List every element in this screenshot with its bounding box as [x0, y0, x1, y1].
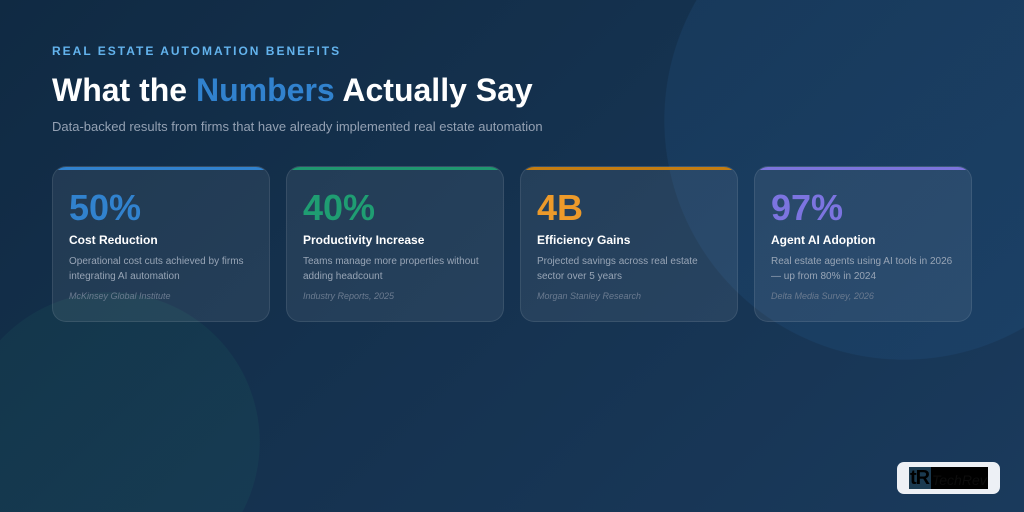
source: Morgan Stanley: Morgan Stanley Research	[537, 291, 641, 301]
description: efficiency gains: Projected savings across real estate sector over 5 years	[537, 256, 698, 282]
logo badge: TechRev	[932, 472, 987, 488]
source: McKinsey: McKinsey Global Institute	[69, 291, 171, 301]
background circle: bottom left	[0, 292, 260, 512]
source: industry reports: Industry Reports, 2025	[303, 291, 394, 301]
label: agent AI adoption: Agent AI Adoption	[771, 233, 875, 247]
source: Delta Media: Delta Media Survey, 2026	[771, 291, 874, 301]
background circle: top right	[664, 0, 1024, 360]
panel: cost reduction	[52, 166, 270, 322]
label: cost reduction: Cost Reduction	[69, 233, 158, 247]
eyebrow heading: REAL ESTATE AUTOMATION BENEFITS	[52, 44, 341, 58]
panel: agent AI adoption	[754, 166, 972, 322]
label: productivity increase: Productivity Increase	[303, 233, 424, 247]
panel: productivity increase	[286, 166, 504, 322]
logo badge: tR	[910, 467, 929, 489]
stat: 4B: 4B	[537, 187, 583, 228]
stat: 40%: 40%	[303, 187, 375, 228]
panel: efficiency gains	[520, 166, 738, 322]
title: What the Numbers Actually Say	[52, 72, 533, 108]
stat: 97%: 97%	[771, 187, 843, 228]
subtitle: Data-backed results from firms that have already implemented real estate automation	[52, 119, 543, 134]
description: agent AI adoption: Real estate agents using AI tools in 2026 — up from 80% in 2024	[771, 256, 952, 282]
logo badge	[897, 462, 1000, 494]
description: cost reduction: Operational cost cuts achieved by firms integrating AI automation	[69, 256, 244, 282]
label: efficiency gains: Efficiency Gains	[537, 233, 630, 247]
description: productivity increase: Teams manage more properties without adding headcount	[303, 256, 479, 282]
stat: 50%: 50%	[69, 187, 141, 228]
